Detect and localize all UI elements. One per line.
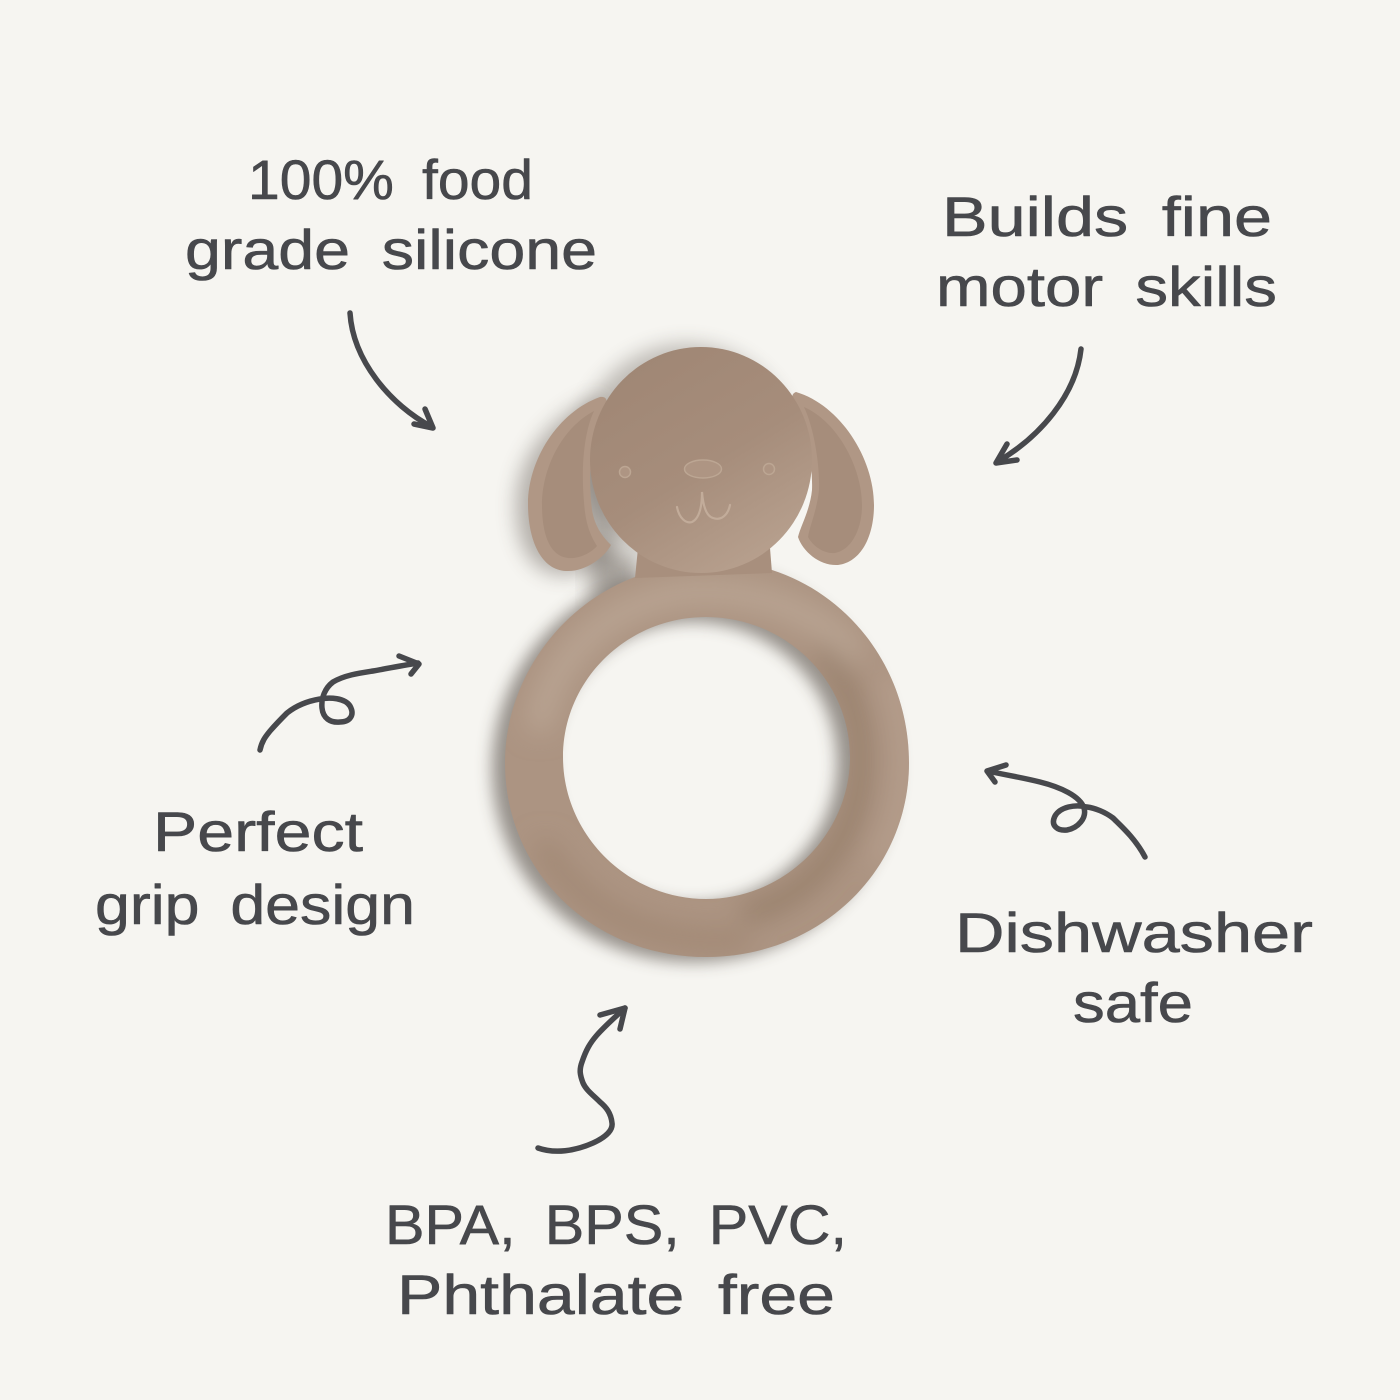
eye left xyxy=(620,466,630,478)
label: BPA, BPS, PVC, phthalate free: BPA, BPS, PVC, xyxy=(385,1193,847,1256)
arrow: from motor skills label xyxy=(996,349,1081,463)
right ear xyxy=(792,392,874,565)
label: dishwasher safe: Dishwasher xyxy=(955,901,1313,964)
label: builds fine motor skills: Builds fine xyxy=(942,185,1272,248)
face xyxy=(620,460,774,522)
head xyxy=(590,347,812,573)
label: 100% food grade silicone xyxy=(185,148,597,281)
label: BPA, BPS, PVC, phthalate free xyxy=(385,1193,847,1326)
label: 100% food grade silicone: 100% food xyxy=(248,148,533,211)
label: perfect grip design: grip design xyxy=(95,873,415,936)
arrow: from dishwasher label xyxy=(987,765,1145,857)
ring xyxy=(505,570,909,957)
label: perfect grip design xyxy=(95,800,415,936)
product: dog teether xyxy=(492,344,909,962)
mouth xyxy=(677,492,730,522)
arrow: to food grade label xyxy=(350,313,433,428)
nose xyxy=(684,460,722,478)
shadow xyxy=(492,344,896,962)
label: builds fine motor skills: motor skills xyxy=(936,255,1277,318)
arrow: from BPA free label xyxy=(538,1008,625,1151)
label: 100% food grade silicone: grade silicone xyxy=(185,218,597,281)
label: BPA, BPS, PVC, phthalate free: Phthalate free xyxy=(397,1263,835,1326)
label: dishwasher safe: safe xyxy=(1073,971,1193,1034)
label: builds fine motor skills xyxy=(936,185,1277,318)
label: dishwasher safe xyxy=(955,901,1313,1034)
eye right xyxy=(764,464,774,474)
arrow: from perfect grip label xyxy=(260,656,419,750)
label: perfect grip design: Perfect xyxy=(153,800,364,863)
neck join xyxy=(635,548,772,578)
left ear xyxy=(528,397,611,571)
